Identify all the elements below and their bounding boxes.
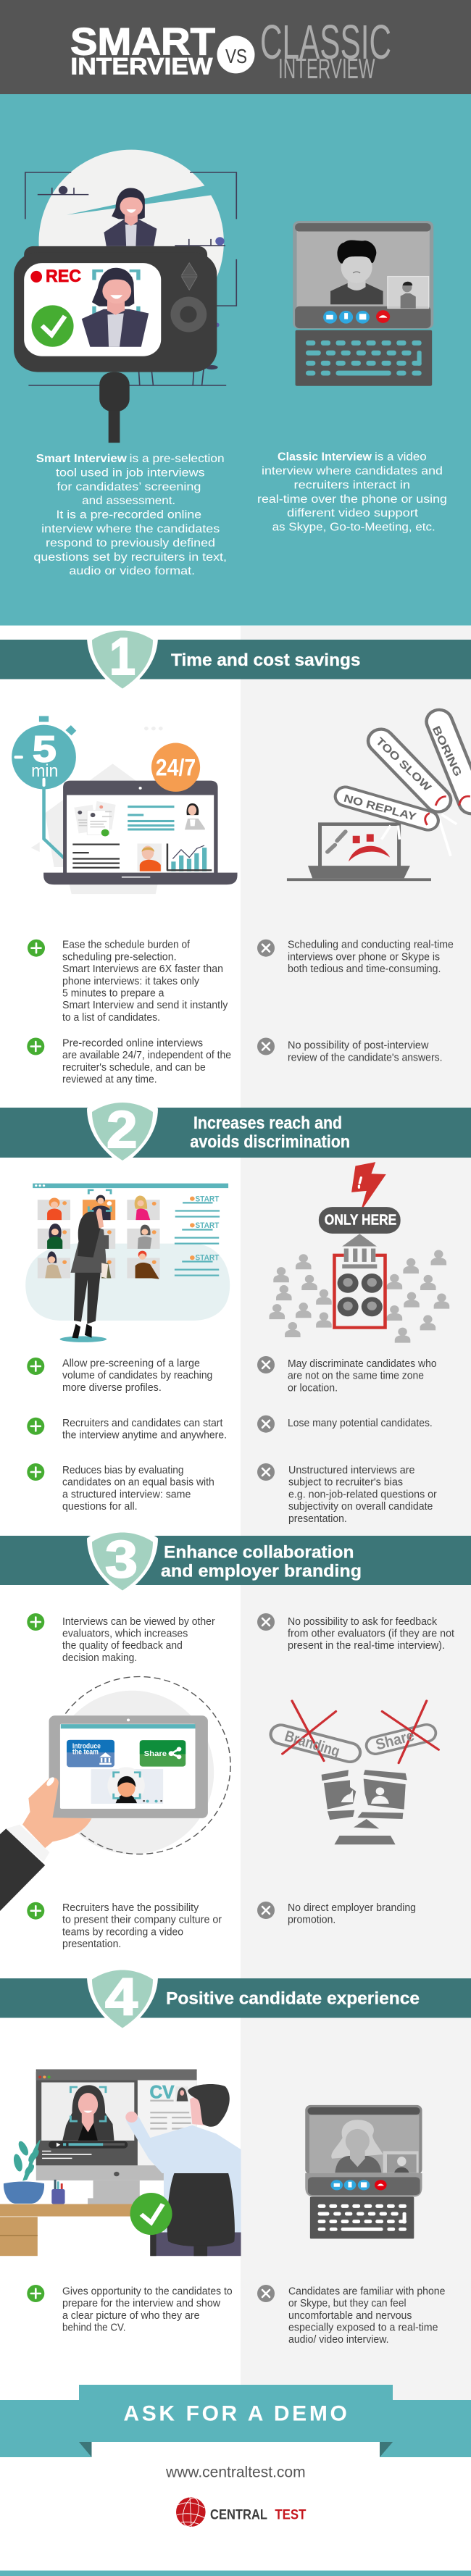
section 2 disadvantages <box>257 1356 437 1525</box>
icon: plus <box>27 2285 44 2302</box>
card: introduce the team: Introduce <box>72 1742 101 1750</box>
section 1 advantages <box>27 940 231 1086</box>
pill: share <box>375 1733 427 1746</box>
start list 2: START <box>195 1222 219 1230</box>
start list 3 <box>175 1254 219 1276</box>
section 1 disadvantages: Scheduling and conducting real-time <box>288 940 454 951</box>
room frame lines <box>25 172 236 385</box>
header banner <box>0 0 471 94</box>
label: share: Share <box>374 1727 416 1754</box>
vs badge: VS <box>225 45 247 67</box>
section 4 disadvantage <box>257 2285 445 2346</box>
icon: cross <box>257 1613 275 1631</box>
website url: www.centraltest.com <box>165 2464 306 2480</box>
24/7 badge: 24/7 <box>156 756 196 781</box>
only here pill: ONLY HERE <box>325 1211 396 1228</box>
pill: too slow <box>381 741 438 800</box>
pill: boring <box>439 722 471 802</box>
only here pill <box>319 1207 401 1234</box>
section 4 advantage: prepare for the interview and show <box>62 2298 221 2309</box>
section 2 disadvantages: are not on the same time zone <box>288 1371 424 1382</box>
section 2 disadvantages: presentation. <box>288 1513 347 1525</box>
notes lines <box>42 2151 91 2158</box>
illustration: 5 minute timer and laptop dashboard <box>12 716 238 894</box>
section 3 advantage <box>27 1613 215 1664</box>
label: no replay: NO REPLAY <box>342 793 417 824</box>
green check badge <box>130 2193 172 2235</box>
plant leaves <box>12 2139 41 2176</box>
laptop frame and base <box>287 824 431 881</box>
section 2 advantages: Reduces bias by evaluating <box>62 1465 184 1476</box>
icon: cross <box>257 940 275 957</box>
vs badge <box>217 35 255 73</box>
woman being recorded <box>104 188 157 246</box>
central test logo: TEST <box>275 2507 306 2523</box>
label: branding: Branding <box>283 1728 342 1760</box>
text: classic interview definition <box>257 451 447 534</box>
desk with drawers <box>0 2204 132 2256</box>
shield number 2 <box>87 1097 158 1166</box>
anxious woman <box>331 2120 383 2173</box>
focus brackets <box>88 1190 111 1210</box>
card: introduce the team: the team <box>72 1748 99 1756</box>
cv document <box>149 2082 191 2128</box>
section 3 advantage: Interviews can be viewed by other <box>62 1616 215 1628</box>
title: smart interview <box>70 20 215 80</box>
section 2 disadvantages: May discriminate candidates who <box>288 1358 437 1370</box>
section 4 advantage: behind the CV. <box>62 2322 126 2334</box>
chart trend line <box>172 845 204 859</box>
section 1 advantages: scheduling pre-selection. <box>62 951 177 963</box>
text: smart interview definition: audio or video format. <box>69 565 195 577</box>
heading: increases reach: avoids discrimination <box>190 1132 350 1152</box>
section 2 advantages: questions for all. <box>62 1501 138 1513</box>
section 1 advantages: Smart Interviews are 6X faster than <box>62 963 223 975</box>
monitor stand <box>36 2172 164 2204</box>
text: smart interview definition: is a pre-selection <box>130 453 225 465</box>
text: smart interview definition: It is a pre-recorded online <box>57 509 201 522</box>
stopwatch <box>12 716 76 789</box>
hand <box>22 1776 91 1848</box>
bottom teal strip <box>0 2570 471 2576</box>
camera dial <box>170 296 207 332</box>
keyboard <box>296 330 432 386</box>
section 4 disadvantage: or Skype, but they can feel <box>288 2298 406 2309</box>
teal light wedge <box>67 185 220 215</box>
backdrop circle <box>51 1691 214 1854</box>
section 3 disadvantage: from other evaluators (if they are not <box>288 1628 454 1640</box>
shield number 1: 1 <box>109 628 136 686</box>
title: classic interview <box>260 15 391 85</box>
heading: increases reach: Increases reach and <box>193 1113 342 1133</box>
illustration: candidate reviewing video and cv <box>0 2070 241 2256</box>
illustration: smart interview camera recording <box>14 150 236 443</box>
text: smart interview definition: for candidates’ screening <box>57 481 201 493</box>
section 1 disadvantages <box>257 940 454 1063</box>
illustration: no branding broken monitor <box>281 1701 438 1844</box>
icon: plus <box>27 1037 44 1055</box>
monitor bottom <box>305 2173 422 2197</box>
red enclosure <box>334 1255 385 1328</box>
start list 3: START <box>195 1254 219 1262</box>
section 2 disadvantages: Unstructured interviews are <box>288 1465 414 1476</box>
section 2 heading band <box>0 1097 471 1166</box>
heading: enhance collaboration <box>161 1543 362 1581</box>
plant pot <box>4 2172 44 2204</box>
icon: plus <box>27 1418 44 1435</box>
section 3b advantage <box>27 1902 222 1950</box>
section 3b disadvantage: No direct employer branding <box>288 1902 416 1914</box>
text: smart interview definition: interview where the candidates <box>41 523 220 535</box>
section 3 advantage: the quality of feedback and <box>62 1640 183 1652</box>
text: classic interview definition: Classic Interview <box>278 451 372 464</box>
section 2 advantages: Allow pre-screening of a large <box>62 1358 200 1369</box>
title: classic interview: INTERVIEW <box>278 54 375 85</box>
cracked monitor <box>322 1770 407 1844</box>
24/7 badge <box>151 743 200 792</box>
camera body <box>14 246 217 443</box>
central test logo <box>176 2496 306 2528</box>
central test logo: CENTRAL <box>210 2507 267 2523</box>
man on call <box>330 241 383 304</box>
right column background: classic interview <box>241 626 471 2400</box>
shelf ornaments <box>59 186 225 369</box>
tablet <box>49 1715 208 1818</box>
label: boring: BORING <box>430 724 464 779</box>
text: smart interview definition: Smart Interview <box>36 453 128 465</box>
section 2 disadvantages: e.g. non-job-related questions or <box>288 1489 437 1500</box>
text: smart interview definition: questions set by recruiters in text, <box>33 551 227 564</box>
ask for a demo text: ASK FOR A DEMO <box>123 2402 347 2425</box>
call control bar <box>295 306 431 328</box>
start list 1: START <box>195 1195 219 1203</box>
candidate avatar <box>137 843 162 871</box>
section 4 disadvantage: uncomfortable and nervous <box>288 2310 412 2322</box>
section 2 disadvantages: subjectivity on overall candidate <box>288 1501 433 1513</box>
heading: positive candidate experience: Positive candidate experience <box>166 1989 420 2009</box>
green approval check <box>32 305 74 347</box>
dark text lines and chart <box>72 843 212 871</box>
red cross over branding <box>283 1701 336 1761</box>
icon: cross <box>257 1415 275 1433</box>
section 1 disadvantages: No possibility of post-interview <box>288 1040 429 1052</box>
section 1 advantages: recruiter's schedule, and can be <box>62 1062 206 1074</box>
laptop body <box>43 781 238 885</box>
shirt cuff <box>6 1825 49 1862</box>
section 1 advantages: Smart Interview and send it instantly <box>62 1000 228 1011</box>
section 3 disadvantage: No possibility to ask for feedback <box>288 1616 438 1628</box>
section 1 advantages: reviewed at any time. <box>62 1074 157 1086</box>
woman in video <box>62 2085 114 2141</box>
pill: branding <box>281 1734 350 1752</box>
laptop screen <box>293 221 433 329</box>
rec indicator <box>30 267 81 286</box>
section 3b advantage: to present their company culture or <box>62 1915 222 1926</box>
section 4 advantage: Gives opportunity to the candidates to <box>62 2286 233 2297</box>
title: smart interview: SMART <box>70 20 215 63</box>
section 2 disadvantages: subject to recruiter's bias <box>288 1477 403 1489</box>
section 3 disadvantage <box>257 1613 454 1652</box>
icon: plus <box>27 1902 44 1920</box>
picture in picture <box>383 2151 419 2175</box>
shield number 2: 2 <box>107 1101 138 1159</box>
man's shirt and chair <box>150 2173 241 2256</box>
section 3b advantage: Recruiters have the possibility <box>62 1902 199 1914</box>
call buttons <box>330 2180 387 2190</box>
section 3b disadvantage: promotion. <box>288 1915 335 1926</box>
cv sheets <box>74 801 116 837</box>
section 1 disadvantages: review of the candidate's answers. <box>288 1052 442 1063</box>
globe icon <box>176 2496 206 2528</box>
section 1 advantages: to a list of candidates. <box>62 1012 160 1024</box>
institution building <box>342 1234 377 1268</box>
silhouettes on monitor <box>341 1787 389 1804</box>
camera arrows <box>181 263 197 290</box>
text: classic interview definition: recruiters interact in <box>294 479 410 491</box>
camera screen <box>24 263 161 356</box>
monitor shell <box>36 2070 197 2173</box>
pen holder <box>51 2180 65 2204</box>
crowd of candidates <box>269 1250 449 1343</box>
section 1 advantages: Pre-recorded online interviews <box>62 1037 203 1049</box>
cv document: CV <box>149 2082 175 2103</box>
dashed orbit <box>65 1677 230 1854</box>
call to action ribbon <box>0 2385 471 2457</box>
shield number 3: 3 <box>105 1531 138 1589</box>
monitor <box>305 2105 422 2175</box>
woman on camera screen <box>82 268 149 347</box>
screen glare <box>328 832 346 852</box>
heading: enhance collaboration: Enhance collaboration <box>164 1543 354 1562</box>
section 2 advantages: volume of candidates by reaching <box>62 1370 212 1381</box>
selected faces <box>338 1274 383 1316</box>
candidates in tiles <box>45 1195 159 1279</box>
recruiter woman seen from behind <box>60 1208 108 1342</box>
sad face on screen <box>349 834 390 861</box>
text: smart interview definition: and assessment. <box>82 495 175 507</box>
section 2 advantages: a structured interview: same <box>62 1489 191 1500</box>
section 2 advantages: candidates on an equal basis with <box>62 1477 214 1489</box>
impact rays <box>382 814 457 856</box>
video player bar <box>49 2141 128 2149</box>
icon: cross <box>257 2285 275 2302</box>
section 4 advantage <box>27 2285 233 2334</box>
candidate tile grid <box>38 1200 160 1278</box>
browser bar <box>33 1184 228 1188</box>
section 2 disadvantages: Lose many potential candidates. <box>288 1418 433 1429</box>
card: introduce the team <box>67 1740 114 1767</box>
card: share: Share <box>144 1749 167 1758</box>
section 2 advantages: more diverse profiles. <box>62 1382 162 1394</box>
section 4 heading band <box>0 1965 471 2033</box>
icon: plus <box>28 940 45 957</box>
section 3 advantage: decision making. <box>62 1652 137 1664</box>
icon: cross <box>257 1356 275 1373</box>
call buttons <box>323 310 390 324</box>
illustration: nervous candidate on classic video call <box>305 2105 422 2238</box>
text: classic interview definition: is a video <box>375 451 427 464</box>
section 4 disadvantage: especially exposed to a real-time <box>288 2322 438 2334</box>
lightning bolt <box>351 1162 386 1212</box>
shield number 4: 4 <box>105 1968 138 2026</box>
icon: cross <box>257 1037 275 1055</box>
text: classic interview definition: interview where candidates and <box>262 465 443 477</box>
illustration: classic interview video call laptop <box>293 221 433 386</box>
shield number 3 <box>87 1527 158 1595</box>
heading: time and cost savings: Time and cost savings <box>171 651 361 670</box>
icon: cross <box>257 1902 275 1919</box>
text: smart interview definition: tool used in job interviews <box>56 467 205 479</box>
section 2 advantages <box>27 1358 227 1513</box>
text: smart interview definition: respond to previously defined <box>46 537 215 549</box>
section 2 advantages: Recruiters and candidates can start <box>62 1418 222 1429</box>
shield number 4 <box>87 1965 158 2033</box>
section 3 disadvantage: present in the real-time interview). <box>288 1640 445 1652</box>
section 3b advantage: teams by recording a video <box>62 1926 183 1938</box>
section 3b disadvantage <box>257 1902 416 1926</box>
backdrop circle <box>38 150 224 335</box>
section 4 advantage: a clear picture of who they are <box>62 2310 200 2322</box>
icon: cross <box>257 1463 275 1481</box>
text: classic interview definition: real-time over the phone or using <box>257 493 447 506</box>
shield number 1 <box>87 626 158 694</box>
section 1 advantages: Ease the schedule burden of <box>62 940 191 951</box>
text: classic interview definition: different video support <box>287 507 419 519</box>
text: smart interview definition <box>33 453 227 577</box>
label: too slow: TOO SLOW <box>373 735 434 795</box>
illustration: frustrated classic interview laptop <box>287 722 471 881</box>
section 1 advantages: are available 24/7, independent of the <box>62 1050 231 1061</box>
suit sleeve <box>0 1828 45 1911</box>
title: classic interview: CLASSIC <box>260 15 391 70</box>
heading: increases reach <box>190 1113 350 1152</box>
section 1 advantages: phone interviews: it takes only <box>62 976 200 987</box>
stopwatch: 5 <box>33 729 57 770</box>
section 4 disadvantage: audio/ video interview. <box>288 2334 388 2346</box>
man seen from behind <box>125 2084 241 2173</box>
section 2 advantages: the interview anytime and anywhere. <box>62 1430 227 1442</box>
woman avatar <box>185 803 205 829</box>
section 1 disadvantages: both tedious and time-consuming. <box>288 963 441 975</box>
icon: plus <box>27 1463 44 1481</box>
illustration: hand holding branded tablet <box>0 1677 230 1911</box>
rec indicator: REC <box>46 267 81 286</box>
section 3 advantage: evaluators, which increases <box>62 1628 188 1640</box>
stopwatch: min <box>31 762 58 781</box>
screen content lines <box>128 806 207 871</box>
icon: plus <box>27 1613 44 1631</box>
illustration: location restricted candidates <box>269 1162 449 1343</box>
illustration: recruiter browsing candidate videos <box>25 1184 230 1342</box>
section 1 disadvantages: interviews over phone or Skype is <box>288 951 440 963</box>
start list 1 <box>175 1195 220 1217</box>
card: share <box>140 1740 186 1767</box>
start list 2 <box>175 1222 219 1244</box>
section 4 disadvantage: Candidates are familiar with phone <box>288 2286 445 2297</box>
pale backdrop <box>25 1244 230 1321</box>
icon: plus <box>27 1358 44 1375</box>
recruiter video tile <box>91 1767 163 1805</box>
red cross over share <box>382 1701 438 1763</box>
pill: no replay <box>346 796 428 821</box>
recruiter picture in picture <box>388 277 429 309</box>
background shapes <box>31 727 163 894</box>
section 1 advantages: 5 minutes to prepare a <box>62 988 164 1000</box>
keyboard <box>310 2197 414 2238</box>
text: classic interview definition: as Skype, Go-to-Meeting, etc. <box>272 522 435 534</box>
section 3 heading band <box>0 1527 471 1595</box>
heading: enhance collaboration: and employer branding <box>161 1562 362 1581</box>
teal intro panel <box>0 94 471 626</box>
section 3b advantage: presentation. <box>62 1939 121 1950</box>
title: smart interview: INTERVIEW <box>70 53 213 80</box>
timer line <box>44 787 65 859</box>
section 1 heading band <box>0 626 471 694</box>
sad marks on pills <box>425 796 470 825</box>
section 2 disadvantages: or location. <box>288 1382 338 1394</box>
